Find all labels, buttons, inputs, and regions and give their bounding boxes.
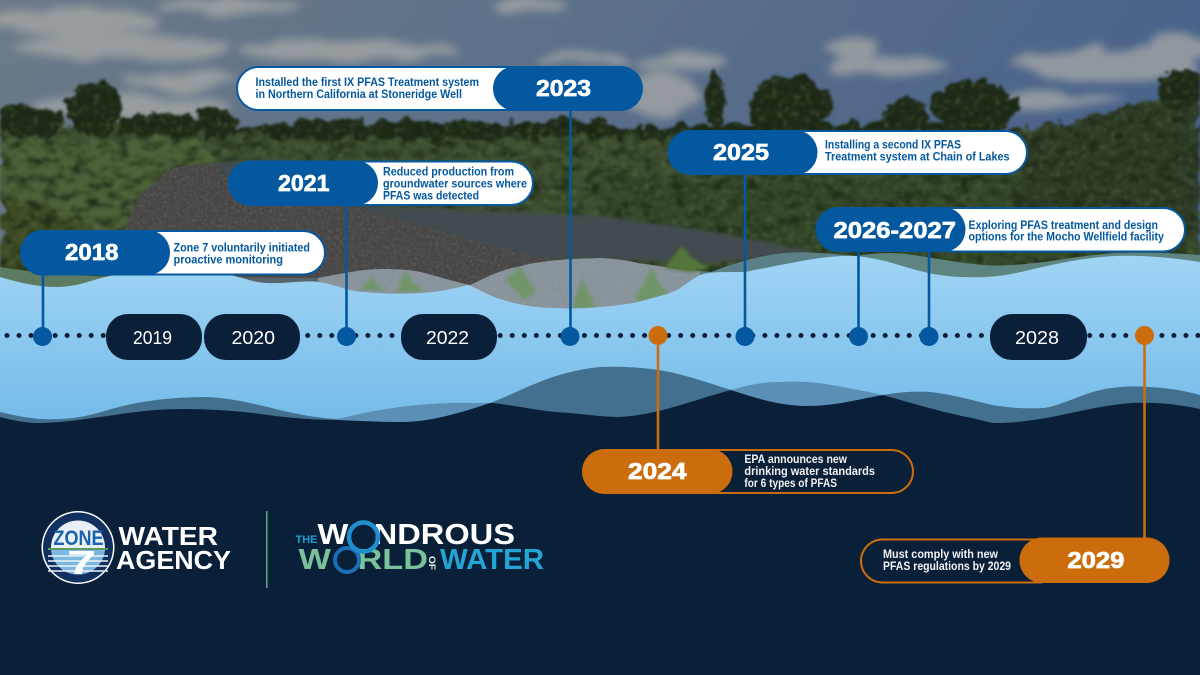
- callout 2029: [861, 538, 1170, 583]
- callout 2029: 2029: [1067, 547, 1124, 573]
- year pill 2022: 2022: [426, 327, 469, 348]
- vegetation and tree line: [0, 68, 1200, 310]
- year pill 2020: 2020: [232, 327, 275, 348]
- year pill 2019: 2019: [133, 327, 172, 348]
- callout 2025: Installing a second IX PFAS: [825, 140, 961, 152]
- callout 2023: Installed the first IX PFAS Treatment system: [256, 77, 479, 89]
- callout 2023: 2023: [536, 75, 591, 101]
- callout 2018: proactive monitoring: [174, 254, 283, 266]
- year pill 2028: 2028: [1015, 327, 1059, 348]
- year pill 2028: [990, 314, 1087, 360]
- background photo: river landscape: [0, 0, 1200, 320]
- icon: interlocking water rings: [335, 522, 378, 572]
- callout 2021: groundwater sources where: [383, 178, 527, 190]
- callout 2023: [237, 66, 643, 111]
- logo: The Wondrous World of Water: OF: [427, 556, 437, 571]
- callout 2018: 2018: [65, 239, 118, 265]
- lower translucent waves: [0, 367, 1200, 430]
- light blue water wave: [0, 256, 1200, 425]
- wordmark: Water Agency: WATER: [118, 523, 218, 551]
- callout 2021: Reduced production from: [383, 166, 514, 178]
- dotted timeline: [7, 333, 1200, 338]
- callout 2024: for 6 types of PFAS: [744, 478, 837, 490]
- icon: Zone 7 badge: [42, 511, 114, 584]
- callout 2025: 2025: [713, 139, 769, 165]
- logo: Zone 7 Water Agency: [42, 511, 231, 584]
- plant on the riverbank: [664, 246, 710, 272]
- callout 2026-2027: 2026-2027: [834, 217, 956, 243]
- callout 2018: [20, 230, 325, 275]
- callout 2026-2027: [816, 207, 1185, 252]
- callout 2021: 2021: [278, 170, 330, 196]
- logo: The Wondrous World of Water: THE: [296, 534, 318, 546]
- callout 2029: PFAS regulations by 2029: [883, 561, 1011, 573]
- navy lower panel: [0, 390, 1200, 675]
- logo: The Wondrous World of Water: WORLD: [298, 544, 428, 576]
- callout 2025: [668, 130, 1027, 175]
- icon: Zone 7 badge: 7: [67, 544, 96, 581]
- callout 2021: [228, 160, 533, 206]
- river water: [210, 159, 815, 262]
- callout 2029: Must comply with new: [883, 549, 998, 561]
- gravel bar: [100, 163, 600, 320]
- logo: The Wondrous World of Water: [296, 519, 544, 576]
- year pill 2019: [106, 314, 202, 360]
- timeline markers: [33, 326, 1154, 346]
- callout 2024: EPA announces new: [744, 454, 847, 466]
- logo: The Wondrous World of Water: WATER: [440, 544, 544, 576]
- callout 2024: [582, 449, 913, 494]
- callout 2025: Treatment system at Chain of Lakes: [825, 152, 1010, 164]
- callout 2026-2027: options for the Mocho Wellfield facility: [968, 232, 1165, 244]
- icon: Zone 7 badge: ZONE: [54, 527, 104, 550]
- callout 2024: drinking water standards: [744, 466, 875, 478]
- callout 2024: 2024: [628, 458, 686, 484]
- year pill 2020: [204, 314, 300, 360]
- lighter foreground seen through the wave: [0, 252, 1200, 308]
- wordmark: Water Agency: AGENCY: [116, 547, 231, 575]
- wordmark: Water Agency: [116, 523, 231, 575]
- callout 2026-2027: Exploring PFAS treatment and design: [968, 220, 1158, 232]
- callout 2021: PFAS was detected: [383, 190, 479, 202]
- callout 2023: in Northern California at Stoneridge Well: [256, 89, 462, 101]
- logo divider: [266, 511, 268, 588]
- year pill 2022: [401, 314, 497, 360]
- logo: The Wondrous World of Water: WONDROUS: [318, 519, 515, 551]
- connector lines: [43, 110, 1144, 540]
- callout 2018: Zone 7 voluntarily initiated: [174, 242, 310, 254]
